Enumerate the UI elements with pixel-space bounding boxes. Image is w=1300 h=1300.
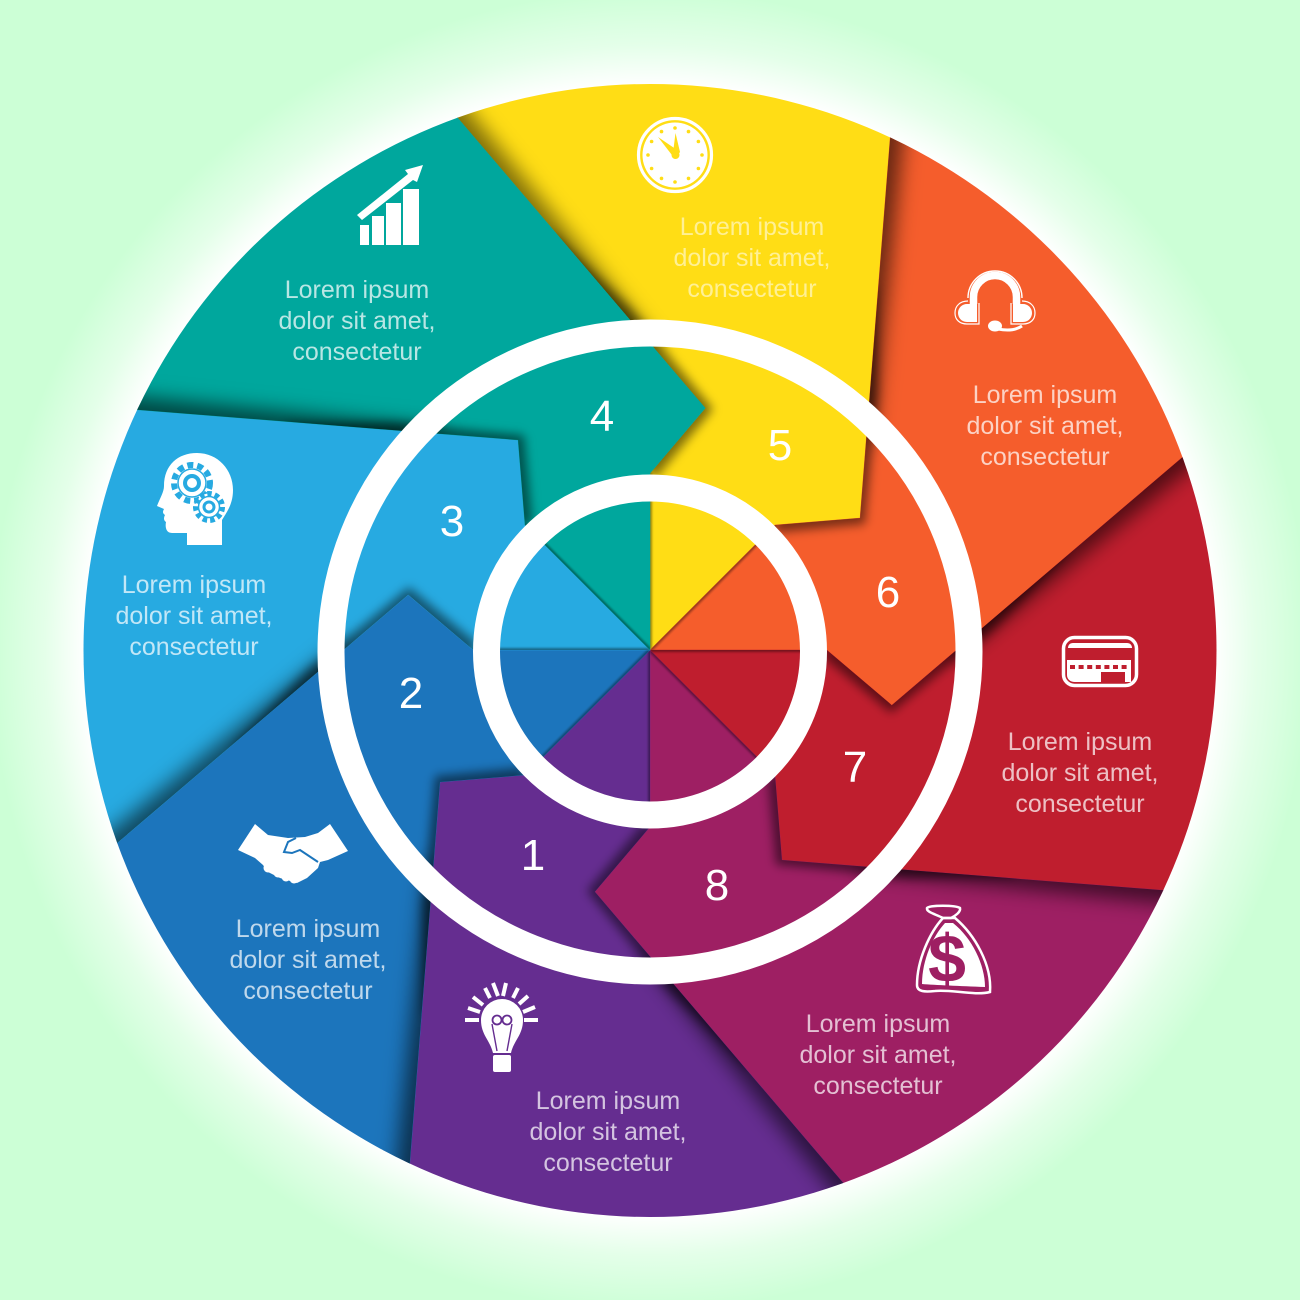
text block: segment 3: consectetur xyxy=(129,633,259,661)
icon: money bag: $ xyxy=(928,921,966,997)
text block: segment 7: Lorem ipsum xyxy=(1008,728,1152,756)
text block: segment 2: consectetur xyxy=(243,977,373,1005)
segment 1: purple xyxy=(410,650,844,1217)
segment 5: yellow xyxy=(457,84,890,650)
segment 3: light blue xyxy=(84,410,650,844)
text block: segment 4: Lorem ipsum xyxy=(285,276,429,304)
icon: handshake xyxy=(238,824,348,884)
text block: segment 1: dolor sit amet, xyxy=(529,1118,687,1146)
segment 4: teal xyxy=(137,118,706,650)
outer white ring xyxy=(331,333,969,971)
text block: segment 5: dolor sit amet, xyxy=(673,244,831,272)
number 5: 5 xyxy=(768,421,792,470)
text block: segment 6: consectetur xyxy=(980,443,1110,471)
number 3: 3 xyxy=(440,497,464,546)
icon: headset xyxy=(955,271,1035,332)
text block: segment 7: dolor sit amet, xyxy=(1001,759,1159,787)
icon: credit card xyxy=(1064,638,1136,686)
number 6: 6 xyxy=(876,568,900,617)
step numbers xyxy=(399,392,900,910)
icon: clock xyxy=(638,118,712,192)
segment 6: orange xyxy=(650,137,1182,706)
number 2: 2 xyxy=(399,669,423,718)
number 7: 7 xyxy=(843,743,867,792)
text block: segment 1: Lorem ipsum xyxy=(536,1087,680,1115)
number 1: 1 xyxy=(521,831,545,880)
icon: growth chart with arrow xyxy=(357,165,423,245)
segment 7: red xyxy=(650,457,1216,890)
inner white ring xyxy=(486,488,814,815)
icon: money bag xyxy=(917,906,990,997)
segment 2: blue xyxy=(117,594,650,1164)
text block: segment 6: dolor sit amet, xyxy=(966,412,1124,440)
icon: light bulb xyxy=(465,983,538,1072)
text block: segment 3: Lorem ipsum xyxy=(122,571,266,599)
circular infographic wheel xyxy=(84,84,1216,1217)
text block: segment 5: Lorem ipsum xyxy=(680,213,824,241)
number 8: 8 xyxy=(705,861,729,910)
text block: segment 5: consectetur xyxy=(687,275,817,303)
text block: segment 8: dolor sit amet, xyxy=(799,1041,957,1069)
text block: segment 1: consectetur xyxy=(543,1149,673,1177)
text block: segment 2: dolor sit amet, xyxy=(229,946,387,974)
coloured wedges xyxy=(84,84,1216,1217)
text block: segment 8: Lorem ipsum xyxy=(806,1010,950,1038)
text block: segment 4: dolor sit amet, xyxy=(278,307,436,335)
text block: segment 8: consectetur xyxy=(813,1072,943,1100)
icon: head with gears xyxy=(157,453,233,545)
text block: segment 4: consectetur xyxy=(292,338,422,366)
text block: segment 2: Lorem ipsum xyxy=(236,915,380,943)
segment 8: magenta xyxy=(595,650,1164,1183)
text block: segment 3: dolor sit amet, xyxy=(115,602,273,630)
number 4: 4 xyxy=(590,392,614,441)
text block: segment 6: Lorem ipsum xyxy=(973,381,1117,409)
text block: segment 7: consectetur xyxy=(1015,790,1145,818)
